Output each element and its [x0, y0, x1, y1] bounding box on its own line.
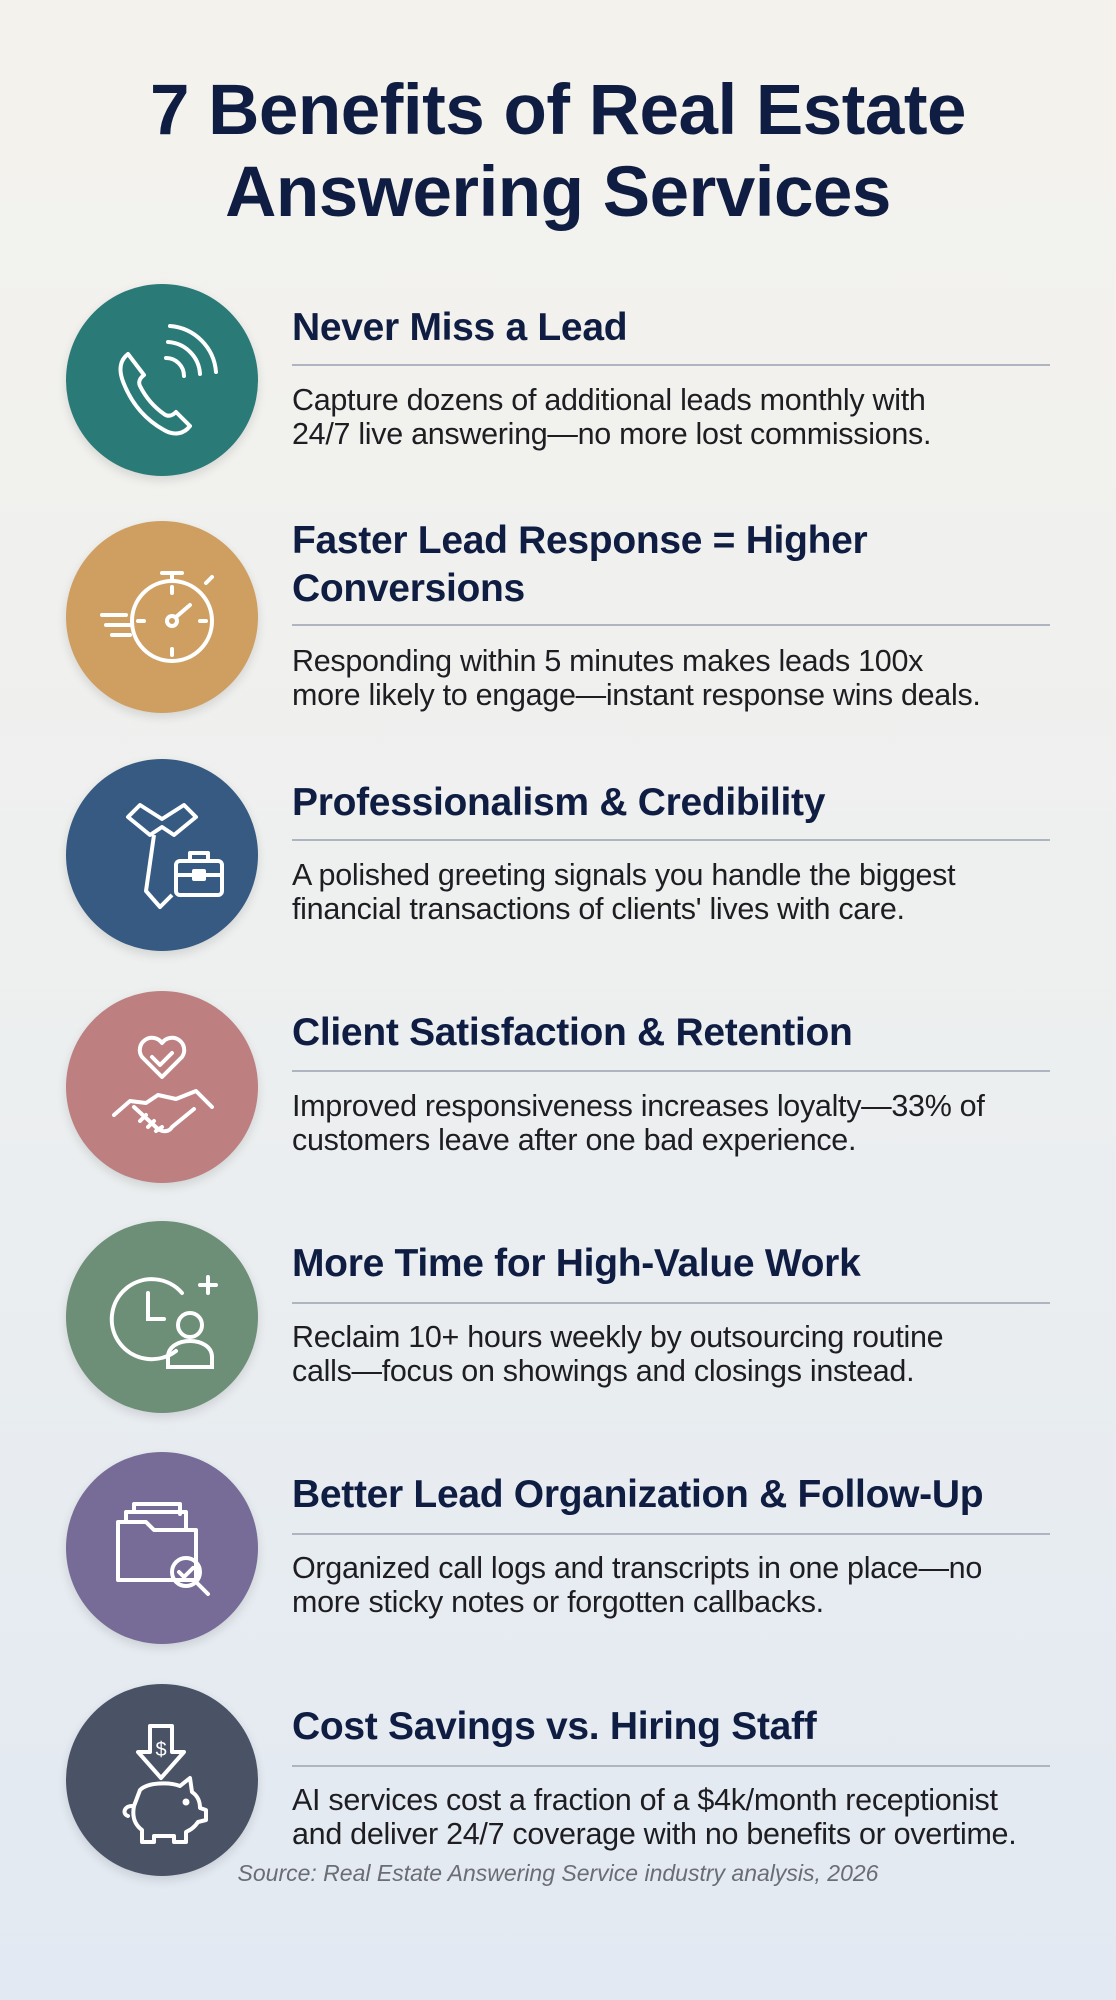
body text: customers leave after one bad experience. — [292, 1123, 856, 1157]
icon: folder with magnifier — [66, 1452, 258, 1644]
body text — [292, 1551, 982, 1619]
icon: piggy bank — [66, 1684, 258, 1876]
body text: Organized call logs and transcripts in one place—no — [292, 1551, 982, 1585]
title — [150, 71, 966, 232]
heading: Cost Savings vs. Hiring Staff — [292, 1705, 816, 1748]
body text — [292, 383, 931, 451]
body text: A polished greeting signals you handle the biggest — [292, 858, 955, 892]
body text — [292, 858, 956, 926]
heading: More Time for High-Value Work — [292, 1242, 860, 1285]
body text — [292, 1783, 1016, 1851]
body text: AI services cost a fraction of a $4k/month receptionist — [292, 1783, 998, 1817]
source note: Source: Real Estate Answering Service industry analysis, 2026 — [238, 1860, 878, 1886]
heading: Faster Lead Response = Higher — [292, 519, 867, 562]
heading — [292, 519, 868, 610]
body text: Responding within 5 minutes makes leads 100x — [292, 644, 923, 678]
panel: more time — [64, 1221, 1050, 1420]
heading: Never Miss a Lead — [292, 306, 627, 349]
heading: Better Lead Organization & Follow-Up — [292, 1473, 983, 1516]
panel: professionalism — [64, 759, 1050, 958]
body text: more likely to engage—instant response wins deals. — [292, 678, 981, 712]
panel: client satisfaction — [64, 991, 1050, 1190]
body text: financial transactions of clients' lives with care. — [292, 892, 905, 926]
body text — [292, 1320, 943, 1388]
body text — [292, 644, 981, 712]
body text: Capture dozens of additional leads monthly with — [292, 383, 926, 417]
heading: Client Satisfaction & Retention — [292, 1011, 853, 1054]
heading: Professionalism & Credibility — [292, 781, 825, 824]
panel: cost savings — [64, 1684, 1050, 1882]
body text: calls—focus on showings and closings instead. — [292, 1354, 914, 1388]
panel: lead organization — [64, 1452, 1050, 1650]
body text: more sticky notes or forgotten callbacks. — [292, 1585, 824, 1619]
icon: stopwatch — [66, 521, 258, 713]
body text: 24/7 live answering—no more lost commissions. — [292, 417, 931, 451]
icon: heart handshake — [66, 991, 258, 1183]
heading: Conversions — [292, 567, 525, 610]
title: 7 Benefits of Real Estate — [150, 71, 966, 150]
body text: and deliver 24/7 coverage with no benefits or overtime. — [292, 1817, 1016, 1851]
body text — [292, 1089, 985, 1157]
icon: phone — [66, 284, 258, 476]
icon: clock and person — [66, 1221, 258, 1413]
icon: piggy bank: $ — [155, 1739, 167, 1761]
body text: Reclaim 10+ hours weekly by outsourcing routine — [292, 1320, 943, 1354]
body text: Improved responsiveness increases loyalty—33% of — [292, 1089, 985, 1123]
panel: faster lead response — [64, 519, 1050, 720]
icon: tie and briefcase — [66, 759, 258, 951]
title: Answering Services — [225, 153, 891, 232]
panel: never miss a lead — [64, 284, 1050, 482]
